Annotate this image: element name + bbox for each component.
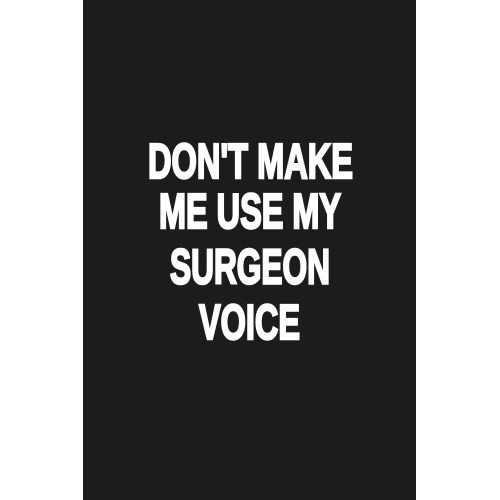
title: cover slogan: DON'T MAKE <box>148 135 353 189</box>
title: cover slogan: ME USE MY <box>159 185 341 239</box>
title: cover slogan <box>148 135 353 350</box>
title: cover slogan: SURGEON <box>170 240 330 294</box>
panel: black book cover <box>83 0 416 500</box>
title: cover slogan: VOICE <box>199 296 300 350</box>
